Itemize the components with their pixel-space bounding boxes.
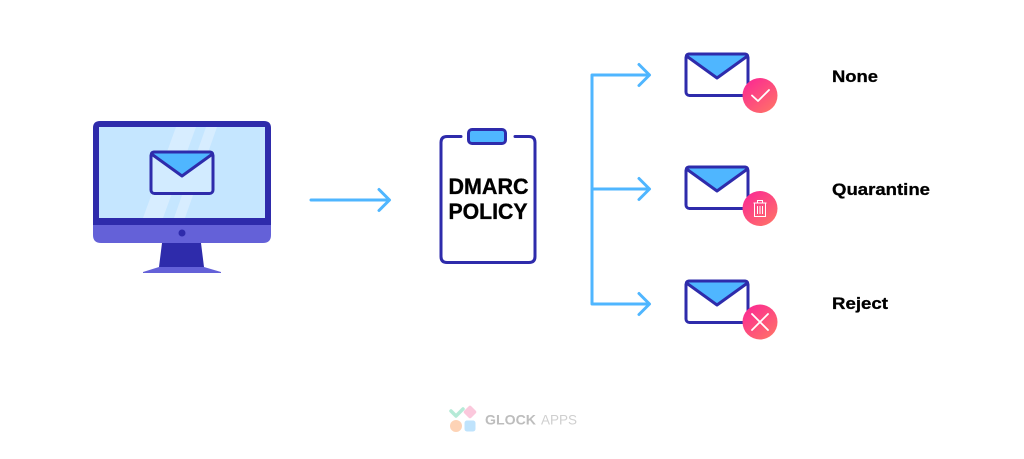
outcome: quarantine xyxy=(686,167,778,226)
label: Quarantine: Quarantine xyxy=(832,180,930,199)
monitor chin xyxy=(93,224,271,243)
monitor base xyxy=(143,267,221,273)
icon: envelope xyxy=(686,167,748,208)
icon: check badge xyxy=(742,78,778,113)
text: DMARC POLICY: DMARC xyxy=(448,174,529,199)
logo wordmark: GLOCK xyxy=(485,412,536,428)
logo wordmark: APPS xyxy=(541,412,577,428)
outcome: reject xyxy=(686,281,778,340)
icon: cross badge xyxy=(742,304,778,340)
clipboard clip xyxy=(468,130,506,144)
icon: computer monitor with email xyxy=(93,121,271,273)
outcome: none xyxy=(686,54,778,113)
icon: clipboard xyxy=(441,130,535,262)
screen glare xyxy=(143,127,217,218)
text: DMARC POLICY: POLICY xyxy=(448,199,528,224)
monitor screen xyxy=(99,127,265,218)
monitor bezel xyxy=(93,121,271,225)
icon: envelope on screen xyxy=(151,152,213,194)
icon: envelope xyxy=(686,281,748,322)
icon: trash badge xyxy=(742,191,778,226)
arrow: monitor to policy xyxy=(311,190,390,210)
text: DMARC POLICY xyxy=(448,174,529,224)
logo: Glock Apps xyxy=(450,405,577,432)
icon: envelope xyxy=(686,54,748,96)
logo mark xyxy=(450,405,477,432)
monitor stand xyxy=(159,243,204,267)
label: None: None xyxy=(832,67,878,86)
arrows: branching tree xyxy=(592,64,650,314)
power button xyxy=(178,230,186,236)
label: Reject: Reject xyxy=(832,294,888,313)
